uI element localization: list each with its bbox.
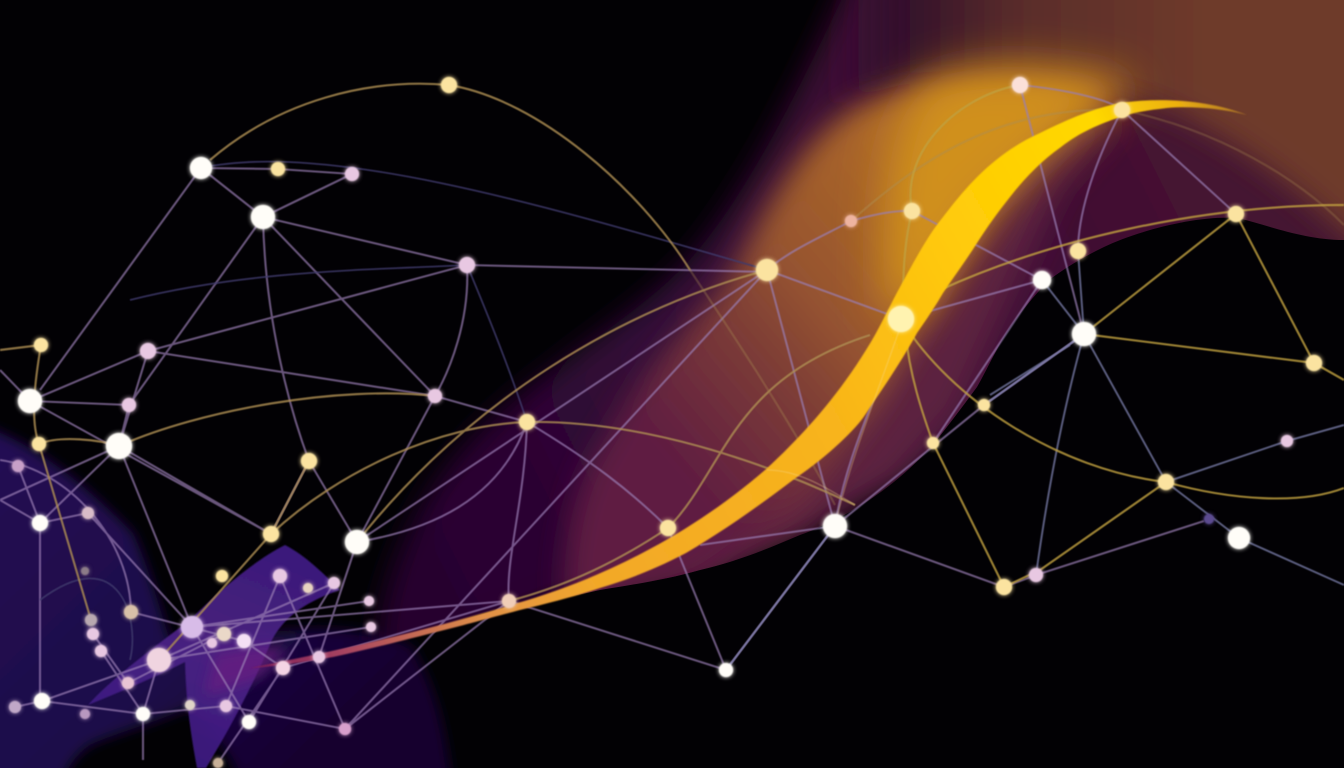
violet haze bottom left [0, 425, 452, 768]
network nodes: white hubs [18, 157, 1250, 729]
ribbon overlay lines [767, 325, 901, 526]
network nodes: pale pink [9, 167, 1293, 768]
network nodes: yellow [32, 77, 1322, 595]
purple to amber swoosh [378, 0, 1344, 670]
network edges: bright gold curves [901, 85, 1344, 587]
golden ribbon [250, 100, 1247, 668]
network edges: faint dark lines [40, 162, 767, 660]
network edges: pale gold curves [0, 84, 1344, 660]
network edges: blue lines [726, 251, 1344, 670]
